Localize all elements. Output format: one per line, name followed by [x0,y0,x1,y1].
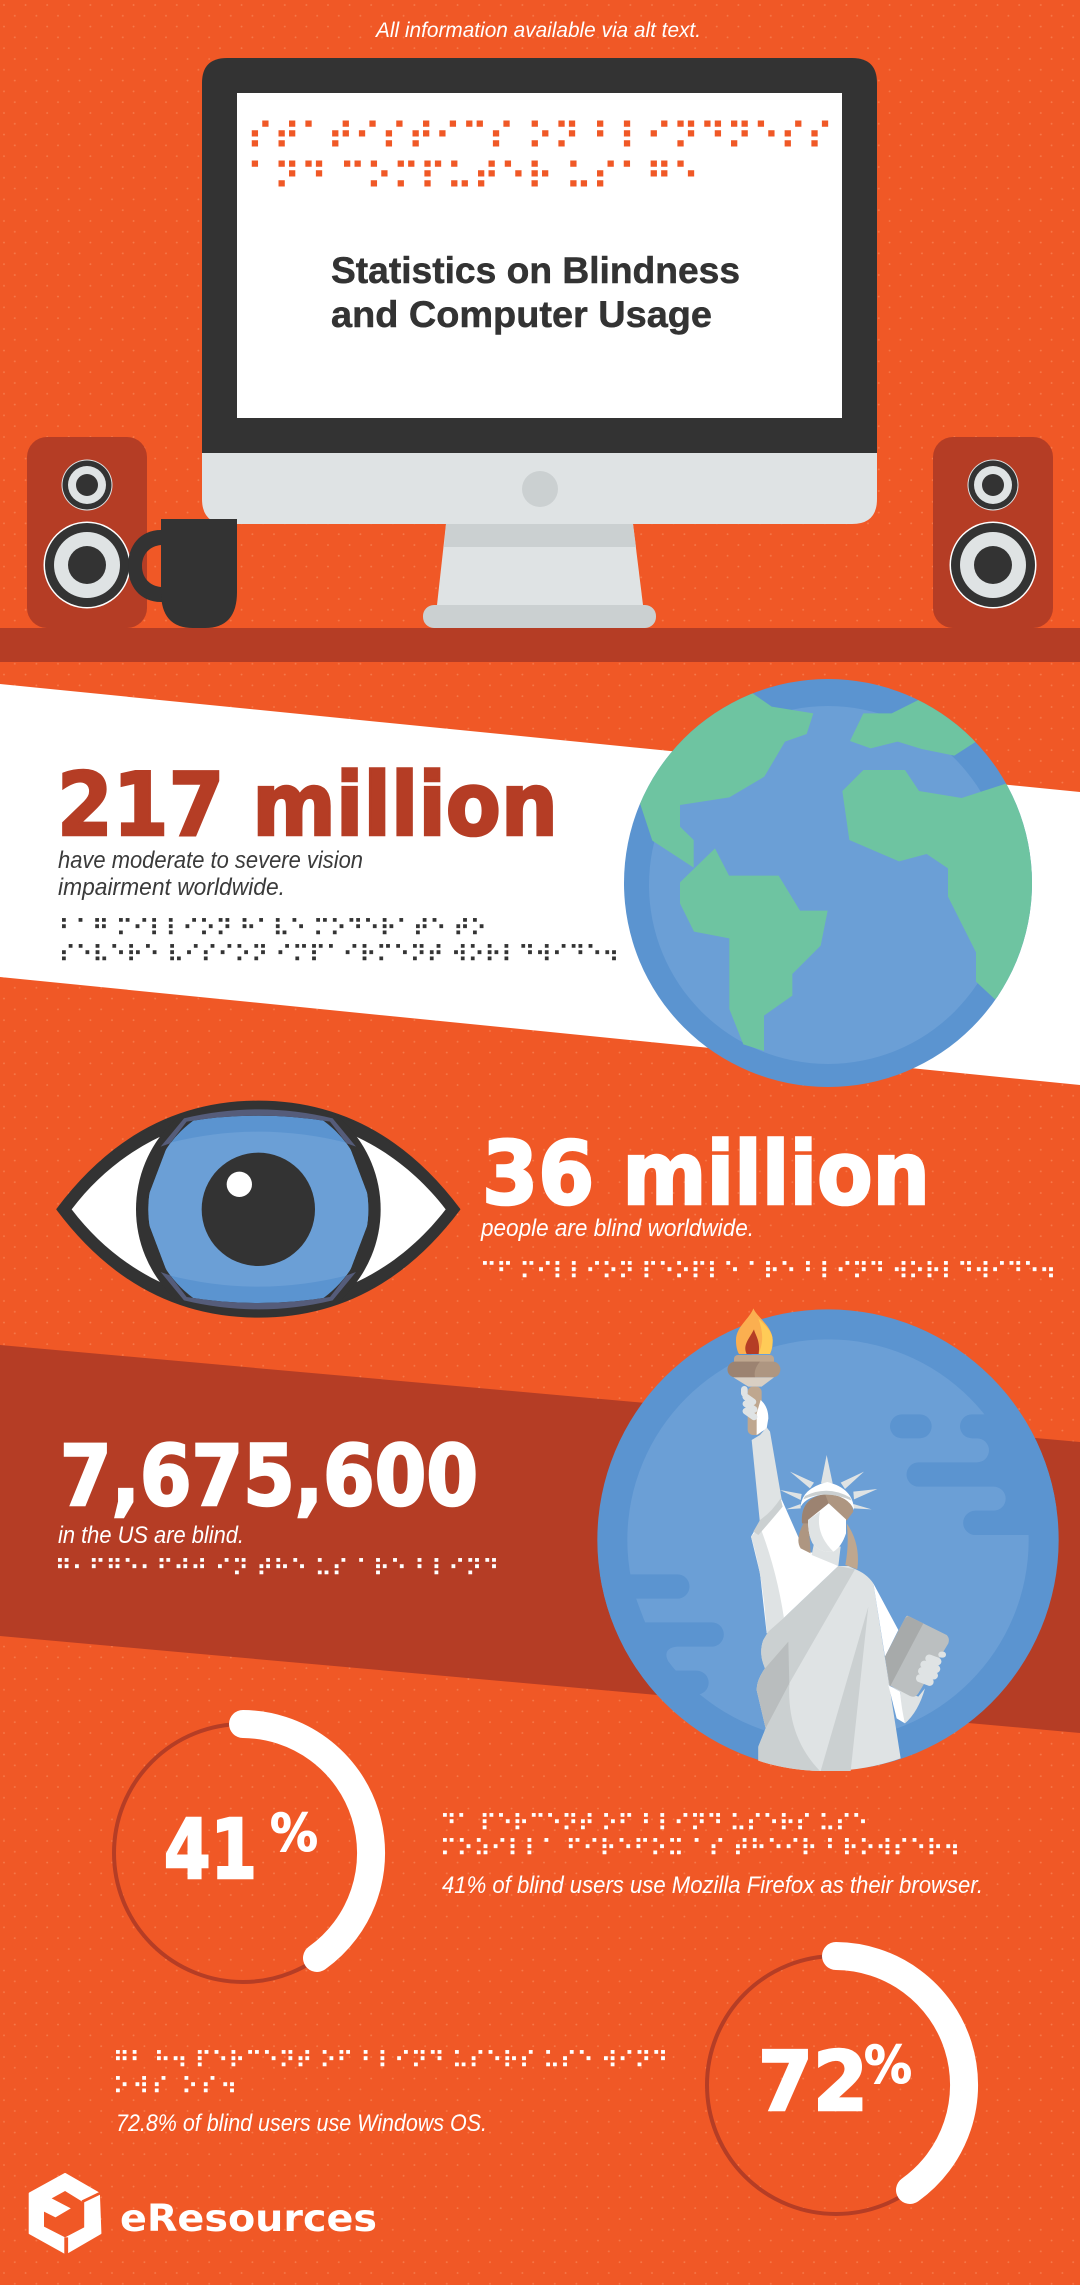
logo [30,2174,377,2255]
braille: ⠙⠁ ⠏⠑⠗⠉⠑⠝⠞ ⠕⠋ ⠃⠇⠊⠝⠙ ⠥⠎⠑⠗⠎ ⠥⠎⠑ [440,1811,868,1837]
monitor stand [423,524,656,628]
tablet [885,1616,949,1697]
gauge percent: % [270,1804,318,1864]
globe [624,679,1053,1087]
clouds [590,1414,1057,1695]
monitor bezel [202,58,877,453]
hand [757,1400,768,1435]
robe [757,1566,901,1771]
title [331,250,740,335]
braille [59,916,619,968]
logo mark [30,2174,101,2255]
braille [440,1811,960,1862]
statue of liberty circle [590,1308,1059,1771]
number: 217 million [57,754,558,856]
stat: Firefox [440,1811,983,1899]
gauge arc [243,1724,371,1958]
gauge value: 72 [758,2035,868,2130]
gauge ring [707,1956,965,2214]
caption: 41% of blind users use Mozilla Firefox as their browser. [442,1872,983,1899]
braille: ⠉⠋ ⠍⠊⠇⠇⠊⠕⠝ ⠏⠑⠕⠏⠇⠑ ⠁⠗⠑ ⠃⠇⠊⠝⠙ ⠺⠕⠗⠇⠙⠺⠊⠙⠑⠲ [480,1259,1056,1285]
gauge: 41% [114,1724,372,1982]
gauge arc [836,1956,964,2190]
desk [0,628,1080,662]
monitor [202,58,877,628]
face [808,1503,846,1552]
raised arm [752,1427,782,1523]
stat: 7,675,600 [55,1427,499,1582]
hair [802,1494,853,1523]
number: 36 million [482,1123,930,1225]
white band [0,684,1080,1085]
monitor screen [237,93,842,418]
stat: Windows [113,2048,668,2137]
stat: 217 million [57,754,619,968]
title: and Computer Usage [331,294,712,335]
left speaker [27,437,147,628]
hair back [798,1523,811,1553]
mug [128,519,237,628]
sleeve [751,1499,838,1633]
braille title: ⠎⠞⠁⠞⠊⠎⠞⠊⠉⠎ ⠕⠝ ⠃⠇⠊⠝⠙⠝⠑⠎⠎ [247,117,833,158]
caption: in the US are blind. [58,1522,244,1549]
logo wordmark: eResources [120,2197,377,2240]
eye icon [56,1100,460,1318]
statue [727,1308,949,1771]
gauge percent: % [864,2036,912,2096]
continents [640,693,1053,1051]
gauge: 72% [707,1956,965,2214]
braille: ⠎⠑⠧⠑⠗⠑ ⠧⠊⠎⠊⠕⠝ ⠊⠍⠏⠁⠊⠗⠍⠑⠝⠞ ⠺⠕⠗⠇⠙⠺⠊⠙⠑⠲ [59,942,619,968]
flame [736,1308,773,1354]
braille title: ⠁⠝⠙ ⠉⠕⠍⠏⠥⠞⠑⠗ ⠥⠎⠁⠛⠑ [247,157,699,198]
crown [801,1482,854,1510]
caption: 72.8% of blind users use Windows OS. [116,2110,487,2137]
header note: All information available via alt text. [374,19,701,42]
caption [58,847,363,901]
torch [734,1355,774,1365]
caption: have moderate to severe vision [58,847,363,874]
braille [113,2048,668,2100]
rays [780,1455,877,1509]
number: 7,675,600 [60,1427,478,1525]
gauge value: 41 [164,1803,257,1898]
caption: impairment worldwide. [58,874,285,901]
monitor button [522,471,558,507]
gauge ring [114,1724,372,1982]
braille title [247,117,833,198]
stat: 36 million [480,1123,1056,1285]
lower arm [873,1583,898,1657]
braille: ⠛⠃ ⠓⠲ ⠏⠑⠗⠉⠑⠝⠞ ⠕⠋ ⠃⠇⠊⠝⠙ ⠥⠎⠑⠗⠎ ⠥⠎⠑ ⠺⠊⠝⠙ [113,2048,668,2074]
braille: ⠛⠂⠋⠛⠑⠂⠋⠚⠚ ⠊⠝ ⠞⠓⠑ ⠥⠎ ⠁⠗⠑ ⠃⠇⠊⠝⠙ [55,1556,499,1582]
right speaker [933,437,1053,628]
title: Statistics on Blindness [331,250,740,291]
braille: ⠍⠕⠵⠊⠇⠇⠁ ⠋⠊⠗⠑⠋⠕⠭ ⠁⠎ ⠞⠓⠑⠊⠗ ⠃⠗⠕⠺⠎⠑⠗⠲ [440,1836,960,1862]
neck [812,1543,841,1566]
book hand [915,1652,946,1687]
caption: people are blind worldwide. [480,1215,754,1242]
monitor chin [202,453,877,524]
braille: ⠃⠁⠛ ⠍⠊⠇⠇⠊⠕⠝ ⠓⠁⠧⠑ ⠍⠕⠙⠑⠗⠁⠞⠑ ⠞⠕ [59,916,487,942]
dark band [0,1345,1080,1733]
braille: ⠕⠺⠎ ⠕⠎⠲ [113,2074,237,2100]
